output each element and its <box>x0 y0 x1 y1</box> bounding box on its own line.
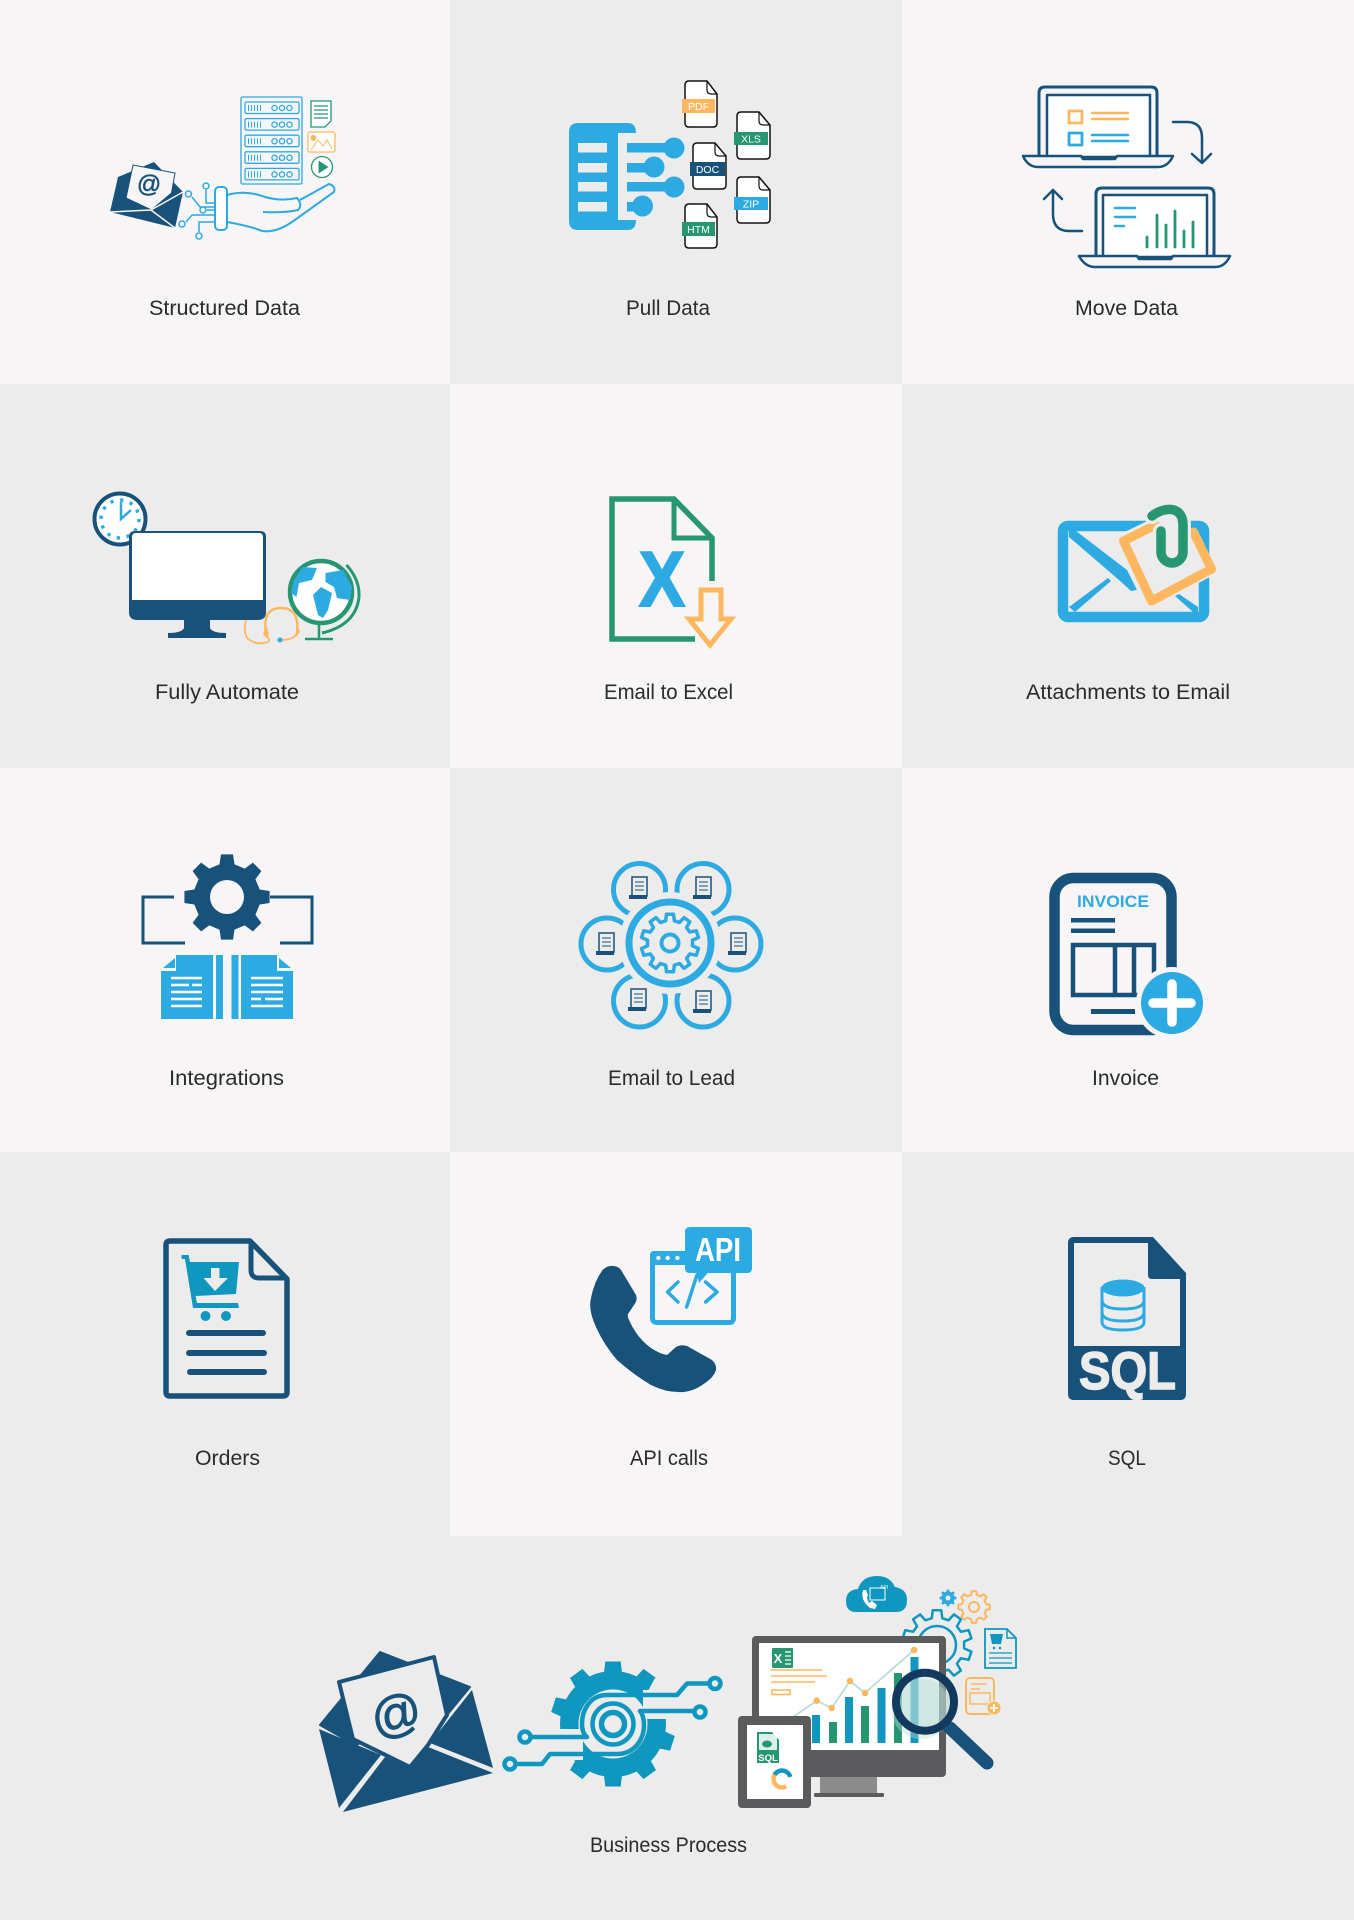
label: Attachments to Email: Attachments to Email <box>1026 681 1230 704</box>
panel: Attachments to Email <box>902 384 1354 768</box>
icon: envelope, server rack and hand: @ <box>137 171 161 198</box>
icon: order form with shopping cart <box>166 1241 287 1396</box>
icon: excel file with download arrow: X <box>639 535 685 623</box>
panel: Structured Data <box>0 0 450 384</box>
icon: invoice document with plus badge: INVOICE <box>1077 892 1149 911</box>
panel: SQL <box>902 1152 1354 1536</box>
icon: envelope, server rack and hand <box>110 97 335 239</box>
icon: dashboard monitor with bar chart: X <box>774 1651 783 1666</box>
panel: Pull Data <box>450 0 902 384</box>
icon: dashboard monitor with bar chart <box>752 1636 946 1797</box>
panel: Integrations <box>0 768 450 1152</box>
label: Email to Excel: Email to Excel <box>604 681 733 704</box>
icon: large open envelope: @ <box>364 1680 428 1748</box>
icon: cloud, gears and mini documents: API <box>880 1585 888 1591</box>
label: Integrations: Integrations <box>169 1067 284 1090</box>
panel: Move Data <box>902 0 1354 384</box>
icon: data comb connected to files: HTM <box>687 224 710 236</box>
icon: large open envelope <box>319 1652 493 1812</box>
icon: data comb connected to files: ZIP <box>743 198 759 210</box>
panel: Business Process <box>0 1536 1354 1920</box>
panel: Orders <box>0 1152 450 1536</box>
panel: Email to Lead <box>450 768 902 1152</box>
icon: data comb connected to files: PDF <box>688 101 709 113</box>
icon: phone and API window: API <box>695 1231 741 1268</box>
icon: central gear surrounded by six documents <box>581 864 761 1027</box>
icon: tablet with SQL file and donut: SQL <box>758 1753 778 1764</box>
icon: SQL file with database: SQL <box>1079 1342 1176 1401</box>
icon: data comb connected to files: DOC <box>696 164 720 176</box>
icon: two laptops exchanging data <box>1023 87 1230 267</box>
icon: gear with circuit lines <box>504 1661 720 1787</box>
label: Pull Data: Pull Data <box>626 297 710 320</box>
icon: data comb connected to files <box>569 81 770 248</box>
panel: API calls <box>450 1152 902 1536</box>
label: Structured Data: Structured Data <box>149 297 300 320</box>
icon: phone and API window <box>590 1227 752 1392</box>
icon: magnifying glass <box>891 1673 987 1763</box>
label: API calls: API calls <box>630 1447 708 1470</box>
icon: tablet with SQL file and donut <box>738 1716 811 1808</box>
label: SQL: SQL <box>1108 1447 1146 1470</box>
panel: Email to Excel <box>450 384 902 768</box>
icon: cloud, gears and mini documents <box>846 1576 1016 1715</box>
icon: invoice document with plus badge <box>1054 878 1208 1039</box>
label: Email to Lead: Email to Lead <box>608 1067 735 1090</box>
icon: envelope with paperclip attachment <box>1063 509 1212 617</box>
icon: data comb connected to files: XLS <box>741 134 761 146</box>
panel: Fully Automate <box>0 384 450 768</box>
icon: SQL file with database <box>1068 1237 1186 1401</box>
icon: excel file with download arrow <box>612 499 731 645</box>
label: Fully Automate: Fully Automate <box>155 681 299 704</box>
icon: clock, monitor, headset and globe <box>94 494 359 643</box>
label: Business Process: Business Process <box>590 1834 747 1857</box>
label: Orders: Orders <box>195 1447 260 1470</box>
label: Invoice: Invoice <box>1092 1067 1159 1090</box>
panel: Invoice <box>902 768 1354 1152</box>
icon: gear linked to documents <box>143 854 312 1019</box>
label: Move Data: Move Data <box>1075 297 1178 320</box>
